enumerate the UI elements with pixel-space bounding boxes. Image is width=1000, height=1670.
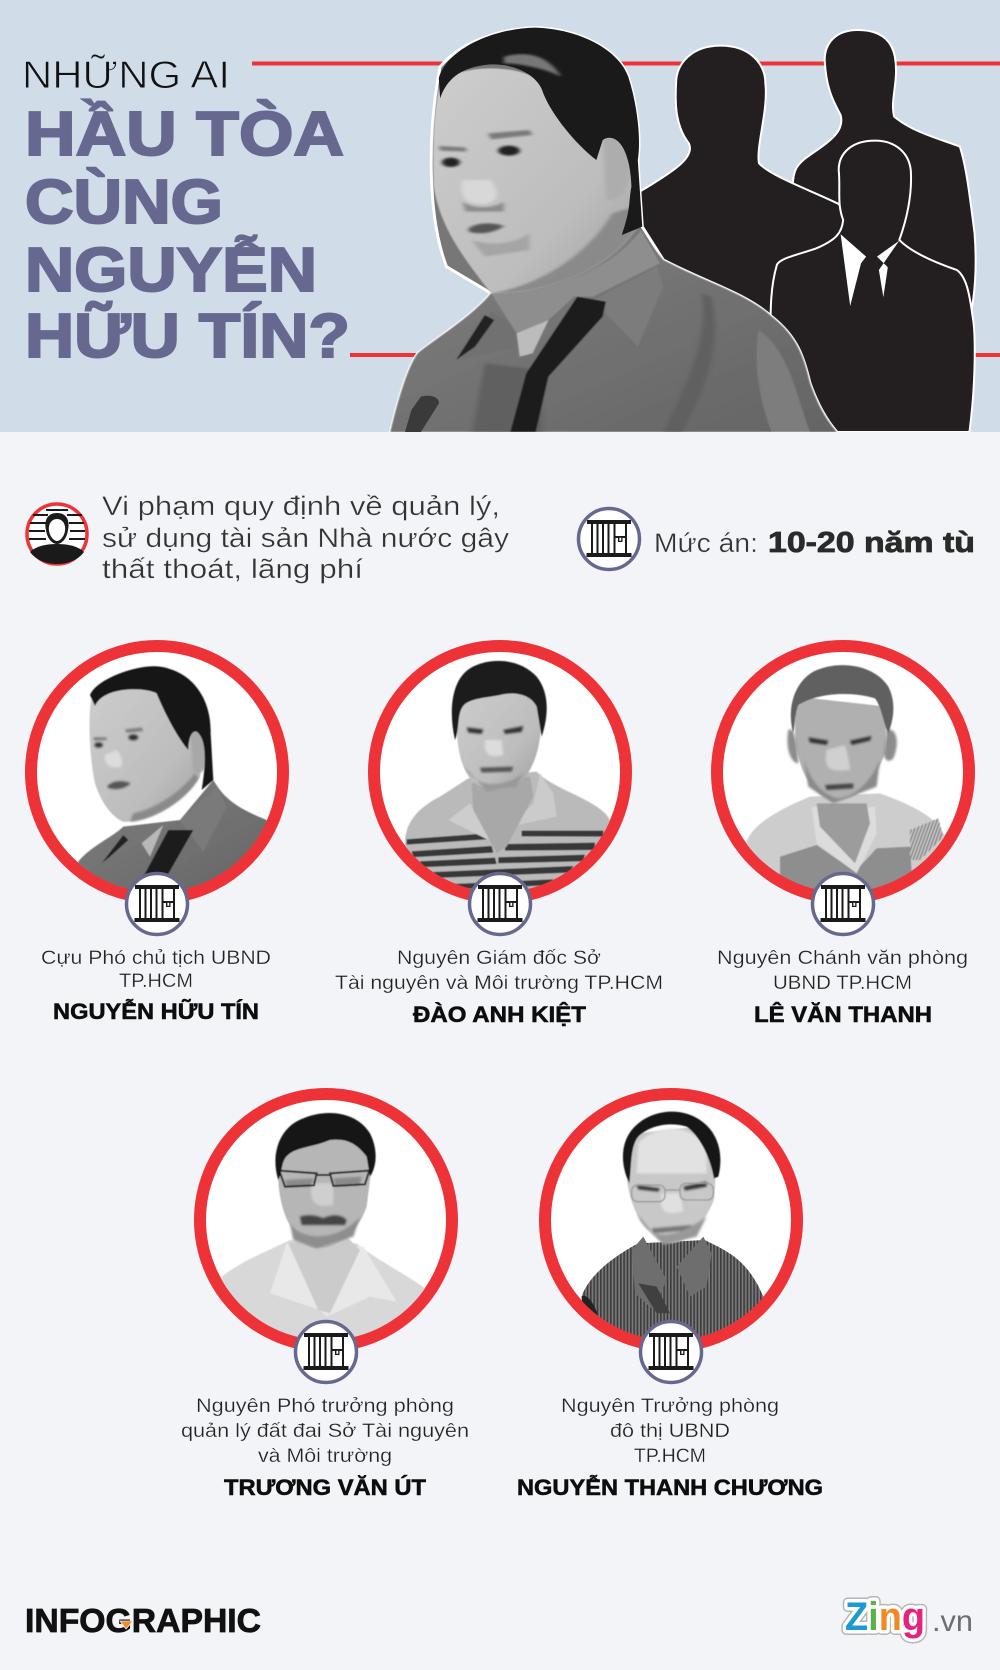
text: name: ĐÀO ANH KIỆT xyxy=(413,1002,587,1027)
portrait ring xyxy=(545,1094,797,1346)
text: offense: thất thoát, lãng phí xyxy=(102,554,364,584)
glasses xyxy=(279,1171,369,1187)
shirt collars xyxy=(606,283,662,345)
red lines xyxy=(252,62,1000,357)
footer: zing logo: .vn xyxy=(932,1605,973,1638)
text: role line 3: và Môi trường xyxy=(258,1446,392,1467)
text: sentence: Mức án: xyxy=(654,528,758,558)
text: role: Nguyên Phó trưởng phòng xyxy=(196,1396,454,1417)
text: offense: sử dụng tài sản Nhà nước gây xyxy=(102,523,510,553)
person: Đào Anh Kiệt xyxy=(335,646,663,1027)
text: role line 2: quản lý đất đai Sở Tài nguyên xyxy=(181,1421,469,1442)
icon: jail xyxy=(640,1322,702,1382)
title: hầu tòa cùng nguyễn hữu tín xyxy=(25,100,350,371)
face xyxy=(433,68,638,293)
photo xyxy=(743,665,953,897)
text: role line 2: Tài nguyên và Môi trường TP.HCM xyxy=(335,973,663,994)
footer: zing logo: Zing xyxy=(845,1595,925,1639)
photo outline xyxy=(390,28,837,432)
stripes xyxy=(407,831,603,889)
portrait ring xyxy=(374,646,626,898)
text: name: NGUYỄN HỮU TÍN xyxy=(53,998,259,1024)
silhouette: back right xyxy=(793,30,976,333)
person: Nguyễn Thanh Chương xyxy=(517,1094,823,1500)
text: role: Cựu Phó chủ tịch UBND xyxy=(41,948,271,969)
text: name: NGUYỄN THANH CHƯƠNG xyxy=(517,1474,823,1500)
footer: infographic label: INFOGRAPHIC xyxy=(25,1602,261,1639)
text: role line 2: đô thị UBND xyxy=(610,1421,730,1442)
text: name: LÊ VĂN THANH xyxy=(754,1002,932,1027)
silhouette: back left xyxy=(641,44,839,313)
silhouettes of co-defendants xyxy=(638,30,976,432)
header panel xyxy=(0,0,1000,432)
collar xyxy=(448,803,490,840)
hair highlight xyxy=(504,54,561,77)
portrait ring xyxy=(31,646,283,898)
text: role line 2: UBND TP.HCM xyxy=(773,973,912,994)
text: role line 2: TP.HCM xyxy=(119,971,193,992)
icon: jail xyxy=(812,874,874,934)
facial details xyxy=(491,207,638,293)
shirt opening xyxy=(510,297,606,432)
text: role: Nguyên Giám đốc Sở xyxy=(397,948,601,969)
footer: zing logo: Zing xyxy=(845,1595,925,1639)
photo: Nguyễn Hữu Tín main portrait xyxy=(390,28,837,432)
shirt xyxy=(390,233,837,432)
text: role: Nguyên Chánh văn phòng xyxy=(717,948,968,969)
text: role: Nguyên Trưởng phòng xyxy=(561,1396,779,1417)
icon: prisoner xyxy=(27,504,87,564)
title: hầu tòa cùng nguyễn hữu tín: CÙNG xyxy=(25,168,223,237)
text: sentence: 10-20 năm tù xyxy=(768,527,975,559)
photo xyxy=(582,1110,764,1337)
portrait ring xyxy=(200,1094,452,1346)
hair xyxy=(439,28,642,235)
silhouette: front with suit xyxy=(770,141,975,432)
icon: jail xyxy=(470,874,530,934)
footer: zing logo: Zing xyxy=(845,1595,925,1639)
title: những ai: NHỮNG AI xyxy=(22,53,230,97)
icon: jail xyxy=(126,874,188,934)
title: hầu tòa cùng nguyễn hữu tín: HẦU TÒA xyxy=(25,100,344,169)
microphone xyxy=(405,396,439,432)
text: offense xyxy=(102,491,510,584)
neck xyxy=(491,230,660,333)
photo xyxy=(405,661,620,897)
text: role line 3: TP.HCM xyxy=(634,1446,706,1467)
text: name: TRƯƠNG VĂN ÚT xyxy=(224,1475,427,1500)
title: hầu tòa cùng nguyễn hữu tín: NGUYỄN xyxy=(25,236,317,305)
title: hầu tòa cùng nguyễn hữu tín: HỮU TÍN? xyxy=(25,302,350,371)
person: Nguyễn Hữu Tín xyxy=(31,646,287,1024)
person: Trương Văn Út xyxy=(181,1094,469,1500)
photo xyxy=(222,1113,430,1347)
glasses xyxy=(632,1183,713,1202)
icon: jail xyxy=(578,508,640,570)
text: sentence xyxy=(654,527,975,559)
photo xyxy=(78,665,267,889)
portrait ring xyxy=(717,646,969,898)
footer: zing logo xyxy=(845,1595,973,1639)
text: offense: Vi phạm quy định về quản lý, xyxy=(102,491,500,521)
shirt folds xyxy=(663,293,715,432)
icon: jail xyxy=(296,1322,356,1382)
person: Lê Văn Thanh xyxy=(717,646,969,1027)
